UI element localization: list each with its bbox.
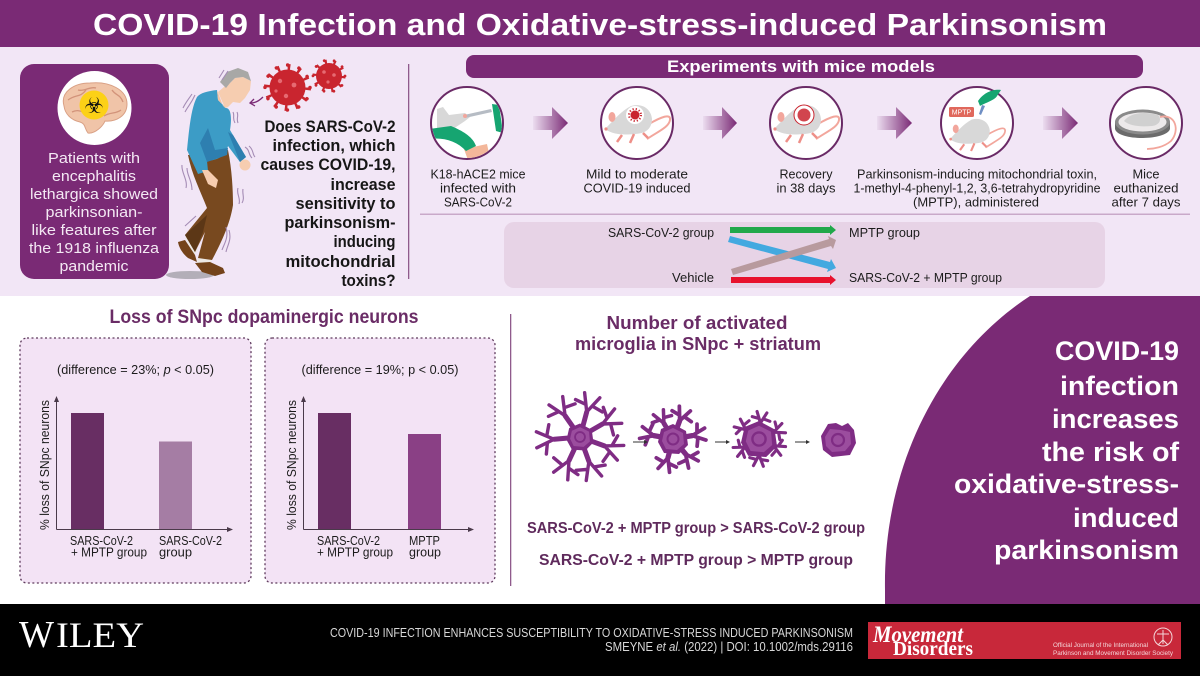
heading: activated microglia: Number of activated: [606, 313, 788, 333]
bar chart: MPTP comparison: + MPTP group: [317, 546, 393, 560]
arrow: brown: [731, 236, 836, 275]
bar chart: MPTP comparison: MPTP: [409, 534, 440, 548]
title banner: [0, 0, 1200, 47]
arrow 2: [703, 107, 737, 139]
logo: Movement Disorders journal: Official Journal of the International: [1053, 642, 1149, 649]
right conclusion panel: induced: [1073, 503, 1179, 533]
caption: step 4: Parkinsonism-inducing mitochondrial toxin,: [857, 166, 1097, 182]
text: research question: inducing: [334, 233, 396, 251]
step 1: infection icon: [429, 87, 503, 163]
panel: chart one: [20, 338, 251, 583]
right conclusion panel: parkinsonism: [994, 535, 1179, 565]
text: research question: causes COVID-19,: [260, 156, 396, 174]
right conclusion panel: COVID-19: [1055, 336, 1179, 366]
heading: loss of neurons: Loss of SNpc dopaminergic neurons: [110, 307, 418, 328]
bar chart: SARS-CoV-2 comparison: SARS-CoV-2: [159, 534, 222, 548]
bar chart: MPTP comparison: % loss of SNpc neurons: [285, 400, 299, 530]
icon: brain with biohazard: ☣: [84, 94, 104, 119]
panel: treatment groups diagram: SARS-CoV-2 group: [608, 225, 714, 240]
panel: treatment groups diagram: MPTP group: [849, 225, 920, 240]
caption: step 1: K18-hACE2 mice: [430, 166, 526, 182]
caption: step 4: [854, 166, 1100, 210]
caption: step 2: [584, 166, 690, 196]
title banner: COVID-19 Infection and Oxidative-stress-induced Parkinsonism: [93, 7, 1107, 42]
text: research question: increase: [330, 176, 396, 194]
citation text: COVID-19 INFECTION ENHANCES SUSCEPTIBILITY TO OXIDATIVE-STRESS INDUCED PARKINSONISM: [330, 626, 853, 640]
text: patients description: like features after: [32, 222, 156, 239]
logo: Movement Disorders journal: [868, 622, 1181, 660]
step 3: recovering mouse icon: [770, 87, 842, 159]
citation text: SMEYNE et al. (2022) | DOI: 10.1002/mds.29116: [605, 640, 853, 654]
caption: step 3: Recovery: [780, 166, 833, 182]
text: research question: toxins?: [342, 272, 396, 290]
text: research question: parkinsonism-: [284, 214, 396, 232]
right conclusion panel: oxidative-stress-: [954, 469, 1179, 499]
logo: Movement Disorders journal: Parkinson and Movement Disorder Society: [1053, 650, 1174, 657]
logo: Movement Disorders journal: Movement: [872, 622, 964, 647]
caption: step 2: COVID-19 induced: [584, 180, 690, 196]
right conclusion panel: [885, 296, 1200, 604]
panel: chart two: [265, 338, 495, 583]
panel: encephalitis lethargica history: [20, 64, 169, 279]
right conclusion panel: infection: [1060, 371, 1179, 401]
panel: treatment groups diagram: SARS-CoV-2 + MPTP group: [849, 270, 1002, 285]
caption: step 3: [776, 166, 836, 196]
caption: step 5: after 7 days: [1112, 194, 1181, 210]
right conclusion panel: the risk of: [1042, 437, 1180, 467]
text: research question: mitochondrial: [286, 253, 396, 271]
text: microglia comparisons: SARS-CoV-2 + MPTP group > SARS-CoV-2 group: [527, 520, 865, 537]
text: patients description: pandemic: [60, 258, 129, 275]
step 2: mouse with virus icon: [601, 87, 673, 159]
step 4: MPTP administered icon: MPTP: [952, 110, 972, 116]
text: microglia comparisons: [527, 520, 865, 569]
panel: treatment groups diagram: [504, 222, 1105, 288]
text: patients description: encephalitis: [52, 168, 136, 185]
caption: step 1: infected with: [440, 180, 516, 196]
icon: virus particles: [250, 60, 345, 110]
caption: step 4: (MPTP), administered: [913, 194, 1039, 210]
text: research question: Does SARS-CoV-2: [264, 118, 396, 136]
caption: step 1: SARS-CoV-2: [444, 194, 512, 210]
text: research question: infection, which: [272, 137, 396, 155]
panel: treatment groups diagram: Vehicle: [672, 270, 714, 285]
panel: chart two: (difference = 19%; p < 0.05): [302, 362, 458, 377]
arrow: red: [731, 275, 836, 285]
icon: elderly man with tremor: [166, 68, 255, 279]
bar chart: MPTP comparison: [285, 396, 474, 560]
icon: brain with biohazard: [63, 83, 127, 133]
bar chart: MPTP comparison: SARS-CoV-2: [317, 534, 380, 548]
logo: Movement Disorders journal: Disorders: [893, 638, 973, 660]
caption: step 4: 1-methyl-4-phenyl-1,2, 3,6-tetrahydropyridine: [854, 180, 1100, 196]
caption: step 5: [1112, 166, 1181, 210]
caption: step 5: Mice: [1132, 166, 1160, 182]
logo: Wiley: W: [19, 614, 54, 656]
bar chart: SARS-CoV-2 comparison: + MPTP group: [71, 546, 147, 560]
heading: activated microglia: [575, 313, 821, 354]
text: research question: sensitivity to: [296, 195, 396, 213]
text: patients description: parkinsonian-: [46, 204, 142, 221]
heading: experiments banner: Experiments with mice models: [667, 57, 935, 76]
footer bar: [0, 604, 1200, 676]
panel: chart one: (difference = 23%; p < 0.05): [57, 362, 214, 377]
citation text: [330, 626, 853, 654]
arrow 4: [1043, 107, 1078, 139]
text: patients description: Patients with: [48, 150, 140, 167]
arrow 3: [877, 107, 912, 139]
background: top panel: [0, 47, 1200, 296]
arrow: blue: [728, 236, 836, 272]
bar chart: MPTP comparison: group: [409, 546, 441, 560]
arrow 1: [533, 107, 568, 139]
caption: step 5: euthanized: [1114, 180, 1178, 196]
caption: step 3: in 38 days: [776, 180, 836, 196]
arrow: green: [730, 225, 836, 235]
text: research question: [260, 118, 396, 290]
text: patients description: the 1918 influenza: [29, 240, 160, 257]
bar chart: SARS-CoV-2 comparison: SARS-CoV-2: [70, 534, 133, 548]
logo: Wiley: [19, 614, 144, 656]
right conclusion panel: increases: [1052, 404, 1179, 434]
bar chart: SARS-CoV-2 comparison: group: [159, 546, 192, 560]
step 4: MPTP administered icon: [941, 87, 1013, 159]
text: patients description: [29, 150, 160, 275]
step 5: euthanized mouse in dish icon: [1110, 87, 1182, 159]
bar chart: SARS-CoV-2 comparison: [38, 396, 233, 560]
icon: microglia activation sequence: [535, 391, 856, 483]
text: microglia comparisons: SARS-CoV-2 + MPTP group > MPTP group: [539, 552, 853, 569]
logo: Wiley: ILEY: [56, 615, 144, 655]
heading: experiments banner: [466, 55, 1143, 78]
heading: activated microglia: microglia in SNpc + striatum: [575, 334, 821, 354]
caption: step 1: [430, 166, 526, 210]
bar chart: SARS-CoV-2 comparison: % loss of SNpc neurons: [38, 400, 52, 530]
text: patients description: lethargica showed: [30, 186, 158, 203]
caption: step 2: Mild to moderate: [586, 166, 688, 182]
